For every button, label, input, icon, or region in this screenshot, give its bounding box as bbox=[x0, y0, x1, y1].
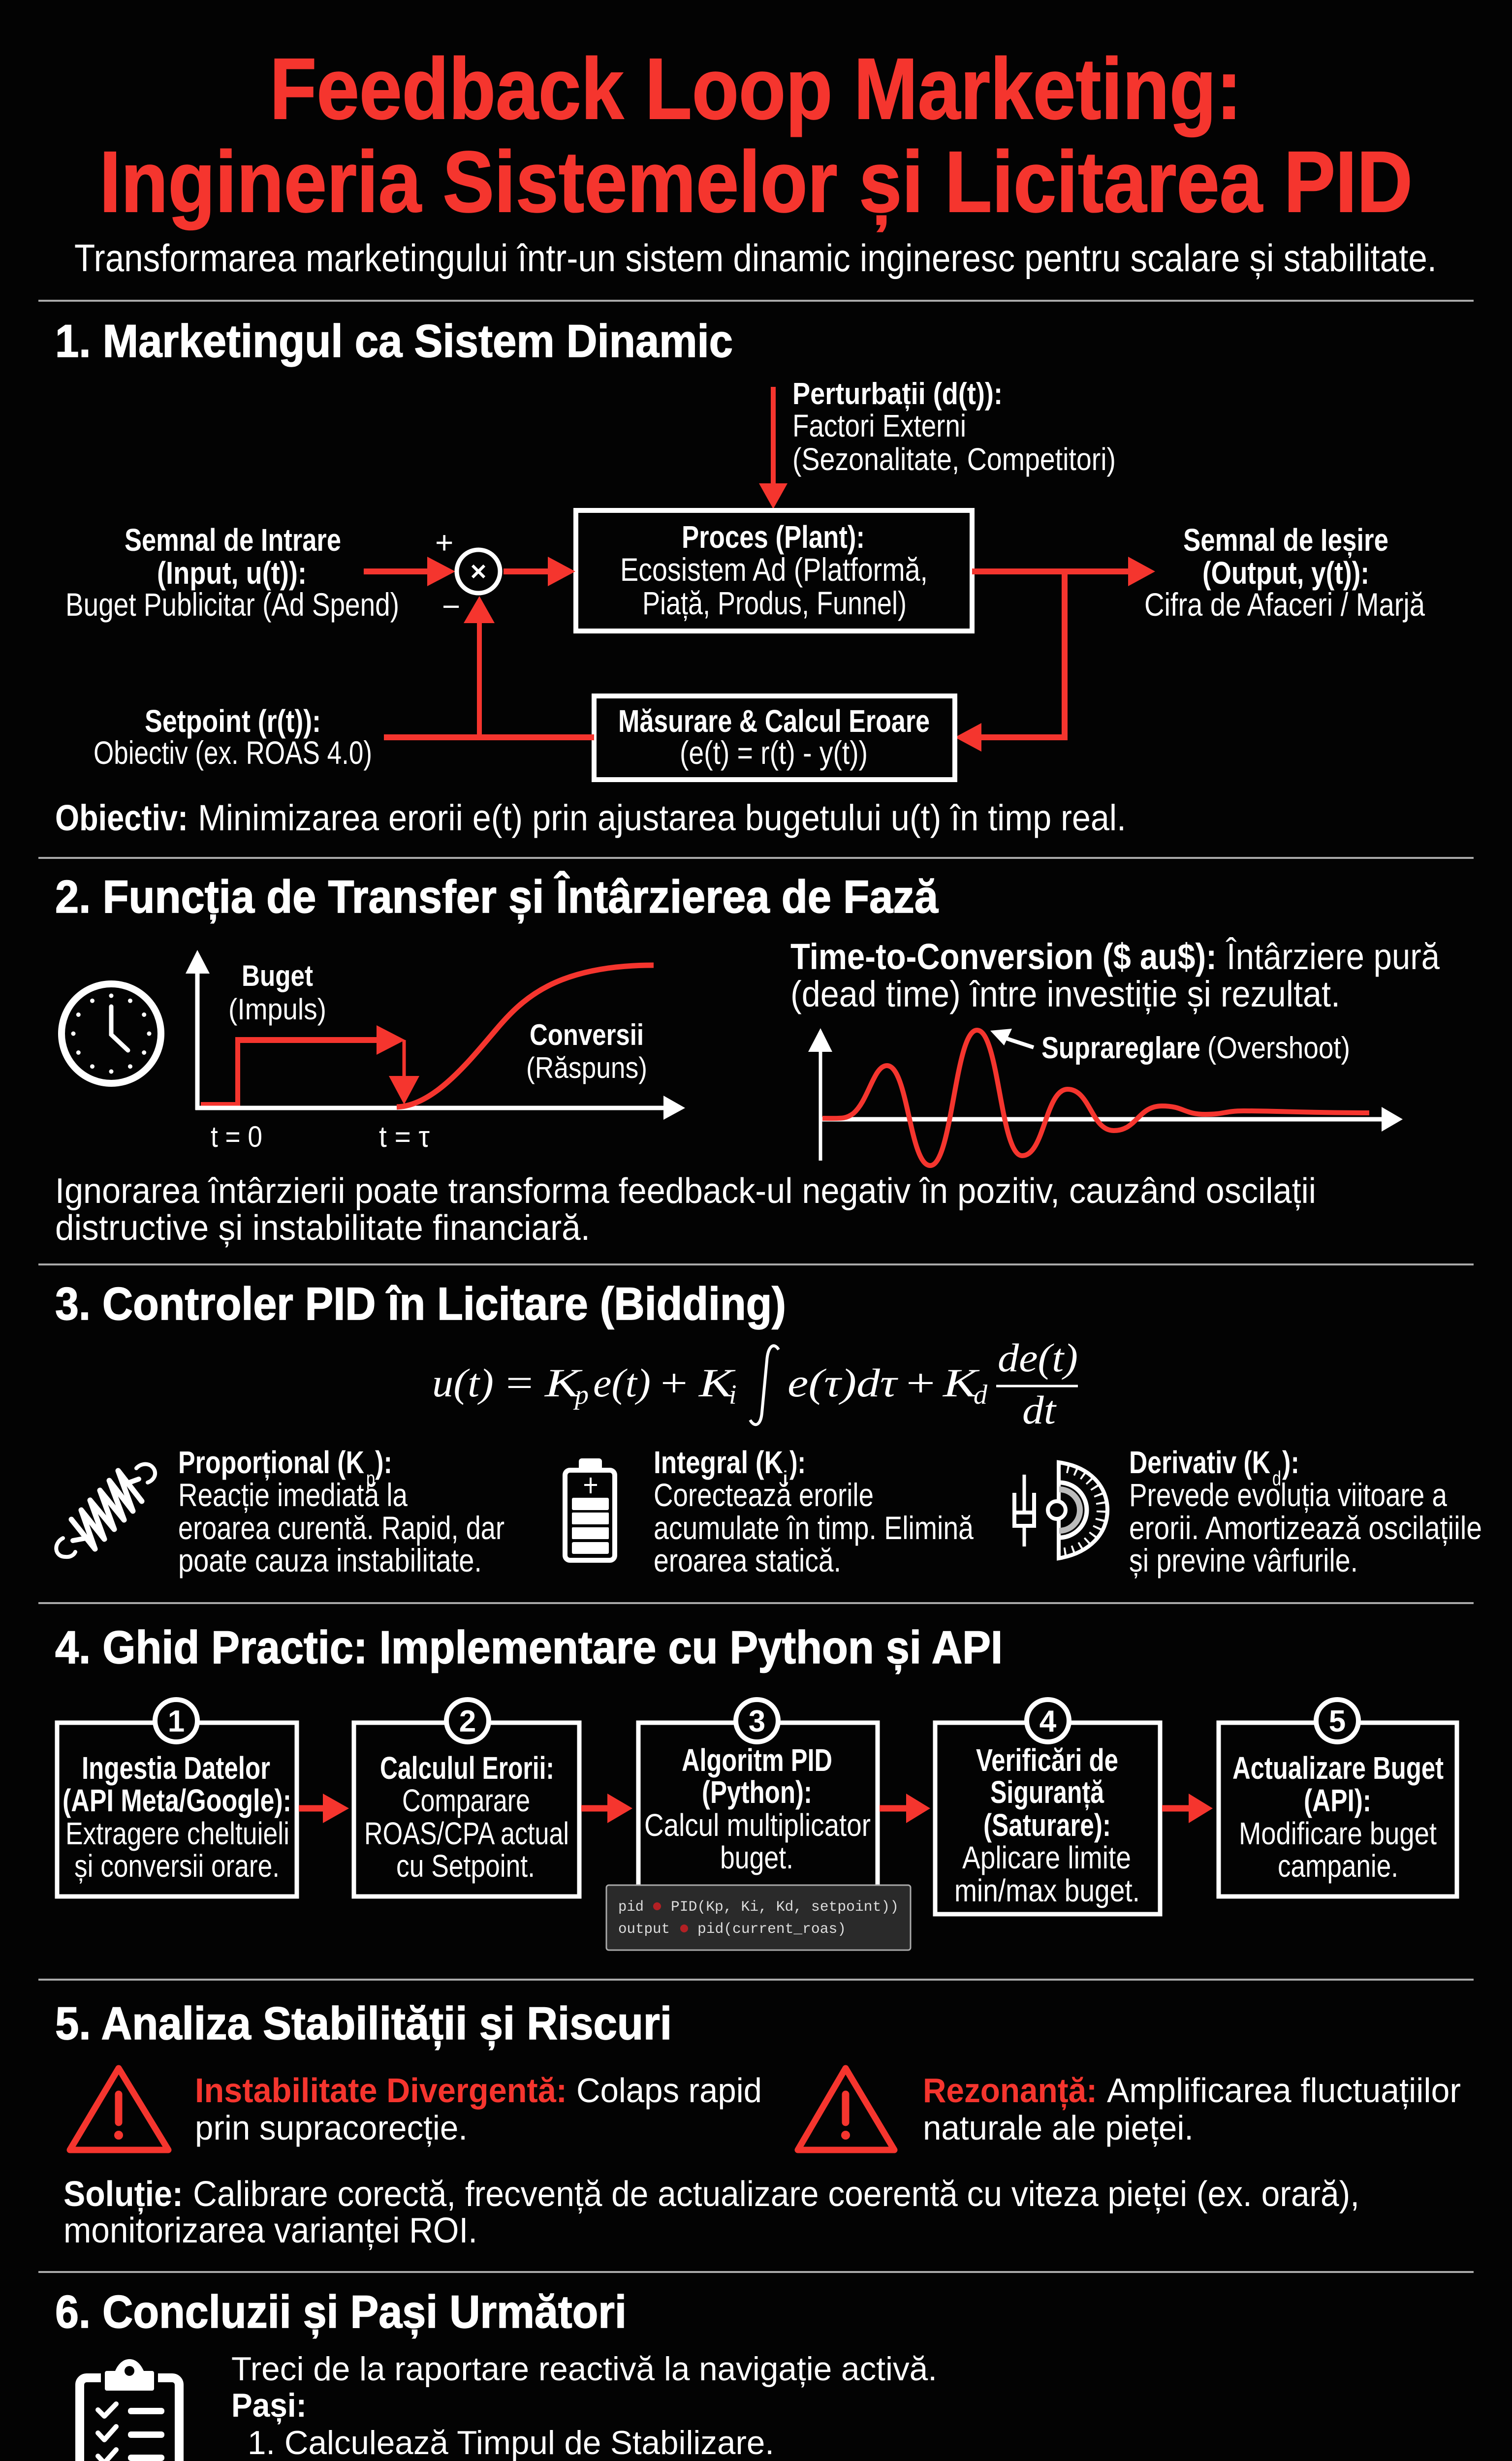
panel: section 5 stability and risks bbox=[55, 1997, 1461, 2250]
text: divergent instability: Instabilitate Divergentă: bbox=[195, 2071, 567, 2110]
text: derivative: Prevede evoluția viitoare a bbox=[1129, 1477, 1447, 1513]
text: delay warning: Ignorarea întârzierii poate transforma feedback-ul negativ în pozitiv, cauzând oscilații bbox=[55, 1171, 1316, 1211]
code snippet: PID(Kp, Ki, Kd, setpoint)) bbox=[671, 1899, 899, 1916]
text: integral: Corectează erorile bbox=[654, 1477, 874, 1513]
heading: section 4: 4. Ghid Practic: Implementare cu Python și API bbox=[55, 1621, 1003, 1674]
text: solution bbox=[63, 2175, 1359, 2250]
icon: summing junction bbox=[435, 525, 500, 624]
box: process plant: Piață, Produs, Funnel) bbox=[642, 585, 907, 621]
heading: section 6: 6. Concluzii și Pași Următori bbox=[55, 2286, 627, 2338]
text: resonance: naturale ale pieței. bbox=[923, 2109, 1194, 2147]
label: disturbances: (Sezonalitate, Competitori) bbox=[792, 442, 1116, 477]
chart: overshoot oscillation: Suprareglare bbox=[1041, 1031, 1200, 1065]
icon: battery bbox=[565, 1458, 615, 1560]
text: derivative: ): bbox=[1282, 1445, 1299, 1480]
box: process plant: Ecosistem Ad (Platformă, bbox=[620, 551, 928, 588]
formula: PID control law: i bbox=[729, 1380, 737, 1410]
text: proportional: eroarea curentă. Rapid, dar bbox=[178, 1510, 504, 1546]
text: solution: Calibrare corectă, frecvență de actualizare coerentă cu viteza pieței (ex. orară), bbox=[193, 2175, 1359, 2214]
chart: delayed step response: Conversii bbox=[530, 1018, 644, 1051]
title: Feedback Loop Marketing: bbox=[270, 41, 1242, 137]
step 1: data ingestion bbox=[57, 1700, 297, 1896]
arrow: junction to plant bbox=[504, 557, 575, 586]
formula: PID control law: K bbox=[544, 1360, 583, 1405]
step 3: PID algorithm bbox=[638, 1700, 878, 1890]
arrow: disturbances into plant bbox=[759, 387, 788, 509]
icon: warning resonance bbox=[798, 2068, 894, 2150]
arrow: step 1 to 2 bbox=[299, 1794, 349, 1823]
arrow: plant to output bbox=[972, 557, 1155, 586]
title bbox=[99, 41, 1413, 232]
text: delay warning: distructive și instabilitate financiară. bbox=[55, 1208, 590, 1248]
arrow: setpoint line up to junction bbox=[384, 596, 594, 737]
heading: section 2: 2. Funcția de Transfer și Întârzierea de Fază bbox=[55, 871, 939, 923]
text: delay warning bbox=[55, 1171, 1316, 1248]
label: disturbances: Perturbații (d(t)): bbox=[792, 377, 1003, 411]
step 5: budget update bbox=[1219, 1700, 1457, 1896]
step 2: error calculation: Calculul Erorii: bbox=[380, 1750, 554, 1786]
step 1: data ingestion: Ingestia Datelor bbox=[82, 1750, 270, 1786]
text: derivative: d bbox=[1272, 1467, 1281, 1490]
step 1: data ingestion: (API Meta/Google): bbox=[63, 1783, 291, 1818]
step 2: error calculation: 2 bbox=[459, 1704, 476, 1738]
text: time to conversion: Time-to-Conversion ($ au$): bbox=[790, 936, 1217, 977]
icon: damper and gauge bbox=[1014, 1462, 1107, 1558]
formula: PID control law: e(t) bbox=[593, 1360, 651, 1405]
chart: overshoot oscillation bbox=[808, 1028, 1403, 1166]
step 4: safety checks bbox=[935, 1700, 1160, 1914]
text: integral: acumulate în timp. Elimină bbox=[654, 1510, 974, 1546]
text: integral: Integral (K bbox=[654, 1445, 783, 1480]
text: integral: eroarea statică. bbox=[654, 1542, 841, 1578]
chart: delayed step response: t = 0 bbox=[211, 1120, 262, 1153]
icon: warning divergence bbox=[70, 2068, 168, 2150]
text: resonance bbox=[923, 2071, 1461, 2147]
icon: spring bbox=[56, 1464, 155, 1557]
step 1: data ingestion: și conversii orare. bbox=[74, 1848, 280, 1884]
box: measurement and error bbox=[594, 696, 955, 780]
text: resonance: Amplificarea fluctuațiilor bbox=[1107, 2071, 1461, 2110]
arrow: step 4 to 5 bbox=[1162, 1794, 1213, 1823]
box: measurement and error: Măsurare & Calcul Eroare bbox=[618, 703, 930, 739]
label: input signal: (Input, u(t)): bbox=[157, 555, 307, 591]
step 3: PID algorithm: Calcul multiplicator bbox=[644, 1807, 871, 1843]
step 3: PID algorithm: Algoritm PID bbox=[682, 1742, 832, 1778]
label: setpoint: Setpoint (r(t)): bbox=[145, 703, 321, 739]
text: objective: Minimizarea erorii e(t) prin ajustarea bugetului u(t) în timp real. bbox=[198, 797, 1126, 838]
step 5: budget update: Modificare buget bbox=[1239, 1816, 1437, 1851]
formula: PID control law: dt bbox=[1022, 1388, 1057, 1432]
text: derivative: și previne vârfurile. bbox=[1129, 1542, 1358, 1578]
text: divergent instability: prin supracorecție. bbox=[195, 2109, 468, 2147]
text: proportional: Proporțional (K bbox=[178, 1445, 364, 1481]
text: proportional bbox=[178, 1445, 504, 1578]
chart: delayed step response bbox=[186, 950, 685, 1153]
step 2: error calculation bbox=[354, 1700, 579, 1896]
text: integral: i bbox=[783, 1467, 788, 1490]
code snippet: pid(current_roas) bbox=[697, 1921, 846, 1938]
arrow: feedback branch to measurement bbox=[955, 571, 1065, 752]
step 4: safety checks: Aplicare limite bbox=[962, 1840, 1131, 1875]
formula: PID control law bbox=[432, 1335, 1078, 1432]
text: solution: Soluție: bbox=[63, 2175, 183, 2214]
text: resonance: Rezonanță: bbox=[923, 2071, 1097, 2110]
step 1: data ingestion: Extragere cheltuieli bbox=[65, 1816, 289, 1851]
text: steps list: 1. Calculează Timpul de Stabilizare. bbox=[248, 2424, 774, 2461]
step 1: data ingestion: 1 bbox=[168, 1704, 185, 1738]
formula: PID control law: + bbox=[661, 1360, 688, 1405]
step 3: PID algorithm: 3 bbox=[749, 1704, 765, 1738]
heading: section 3: 3. Controler PID în Licitare (Bidding) bbox=[55, 1278, 786, 1329]
text: integral bbox=[654, 1445, 974, 1578]
label: disturbances bbox=[792, 377, 1116, 477]
panel: section 4 practical guide bbox=[55, 1621, 1457, 1950]
heading: section 5: 5. Analiza Stabilității și Riscuri bbox=[55, 1997, 672, 2050]
text: divergent instability bbox=[195, 2071, 762, 2147]
icon: clipboard checklist bbox=[80, 2359, 179, 2461]
step 2: error calculation: ROAS/CPA actual bbox=[364, 1816, 569, 1851]
text: steps list: Treci de la raportare reactivă la navigație activă. bbox=[231, 2350, 937, 2388]
chart: delayed step response: Buget bbox=[242, 959, 313, 992]
step 5: budget update: campanie. bbox=[1278, 1848, 1398, 1884]
code snippet: pid bbox=[618, 1899, 644, 1916]
formula: PID control law: d bbox=[974, 1380, 988, 1410]
formula: PID control law: de(t) bbox=[998, 1335, 1078, 1380]
formula: PID control law: u(t) bbox=[432, 1360, 494, 1405]
box: measurement and error: (e(t) = r(t) - y(t)) bbox=[680, 734, 868, 771]
text: derivative bbox=[1129, 1445, 1482, 1578]
formula: PID control law: = bbox=[506, 1360, 533, 1405]
text: solution: monitorizarea varianței ROI. bbox=[63, 2211, 477, 2250]
arrow: step 3 to 4 bbox=[880, 1794, 930, 1823]
chart: delayed step response: (Impuls) bbox=[228, 993, 326, 1026]
text: time to conversion: (dead time) între investiție și rezultat. bbox=[790, 974, 1340, 1014]
text: divergent instability: Colaps rapid bbox=[576, 2071, 762, 2110]
chart: delayed step response: t = τ bbox=[379, 1120, 430, 1153]
code snippet: output bbox=[618, 1921, 670, 1938]
step 4: safety checks: min/max buget. bbox=[954, 1873, 1140, 1908]
formula: PID control law: K bbox=[943, 1360, 980, 1405]
text: objective: Obiectiv: bbox=[55, 797, 188, 838]
arrow: input to summing junction bbox=[364, 557, 455, 586]
panel: section 2 transfer function bbox=[55, 871, 1440, 1248]
text: proportional: poate cauza instabilitate. bbox=[178, 1542, 482, 1578]
text: steps list: Pași: bbox=[231, 2387, 307, 2425]
code snippet bbox=[606, 1885, 911, 1950]
box: process plant: Proces (Plant): bbox=[682, 519, 865, 555]
text: steps list bbox=[231, 2350, 937, 2461]
box: process plant bbox=[576, 510, 972, 631]
panel: section 6 conclusions bbox=[55, 2286, 1348, 2461]
text: time to conversion bbox=[790, 936, 1440, 1014]
panel: section 1 dynamic system bbox=[55, 315, 1425, 838]
icon: clock bbox=[62, 984, 161, 1083]
formula: PID control law: + bbox=[906, 1360, 935, 1405]
icon: summing junction: − bbox=[442, 589, 460, 624]
step 4: safety checks: 4 bbox=[1040, 1704, 1057, 1738]
text: proportional: ): bbox=[375, 1445, 392, 1480]
icon: summing junction: + bbox=[435, 525, 453, 560]
label: output signal: Semnal de Ieșire bbox=[1183, 522, 1388, 558]
label: input signal bbox=[65, 522, 399, 623]
step 5: budget update: Actualizare Buget bbox=[1232, 1750, 1444, 1786]
step 5: budget update: (API): bbox=[1304, 1783, 1371, 1818]
label: output signal: Cifra de Afaceri / Marjă bbox=[1144, 586, 1425, 623]
step 5: budget update: 5 bbox=[1329, 1704, 1346, 1738]
label: disturbances: Factori Externi bbox=[792, 408, 966, 443]
formula: PID control law: K bbox=[698, 1360, 736, 1405]
label: input signal: Buget Publicitar (Ad Spend) bbox=[65, 586, 399, 623]
formula: PID control law: p bbox=[573, 1380, 589, 1410]
step 2: error calculation: cu Setpoint. bbox=[396, 1848, 535, 1884]
step 4: safety checks: Siguranță bbox=[990, 1774, 1104, 1810]
step 3: PID algorithm: buget. bbox=[720, 1840, 793, 1875]
label: setpoint: Obiectiv (ex. ROAS 4.0) bbox=[94, 734, 372, 771]
formula: PID control law: e(τ)dτ bbox=[788, 1360, 898, 1405]
heading: section 1: 1. Marketingul ca Sistem Dinamic bbox=[55, 315, 733, 367]
text: integral: ): bbox=[789, 1445, 806, 1480]
step 4: safety checks: (Saturare): bbox=[983, 1807, 1111, 1843]
label: setpoint bbox=[94, 703, 372, 771]
step 2: error calculation: Comparare bbox=[402, 1783, 530, 1818]
chart: delayed step response: (Răspuns) bbox=[526, 1051, 647, 1084]
label: output signal bbox=[1144, 522, 1425, 623]
panel: section 3 PID controller bbox=[55, 1278, 1482, 1578]
text: time to conversion: Întârziere pură bbox=[1226, 936, 1440, 977]
label: input signal: Semnal de Intrare bbox=[125, 522, 341, 558]
text: proportional: p bbox=[366, 1467, 375, 1490]
arrow: step 2 to 3 bbox=[581, 1794, 632, 1823]
text: proportional: Reacție imediată la bbox=[178, 1477, 408, 1513]
chart: overshoot oscillation: (Overshoot) bbox=[1207, 1031, 1350, 1065]
text: derivative: Derivativ (K bbox=[1129, 1445, 1270, 1480]
step 4: safety checks: Verificări de bbox=[976, 1742, 1118, 1778]
step 3: PID algorithm: (Python): bbox=[702, 1774, 812, 1810]
label: output signal: (Output, y(t)): bbox=[1202, 555, 1369, 591]
